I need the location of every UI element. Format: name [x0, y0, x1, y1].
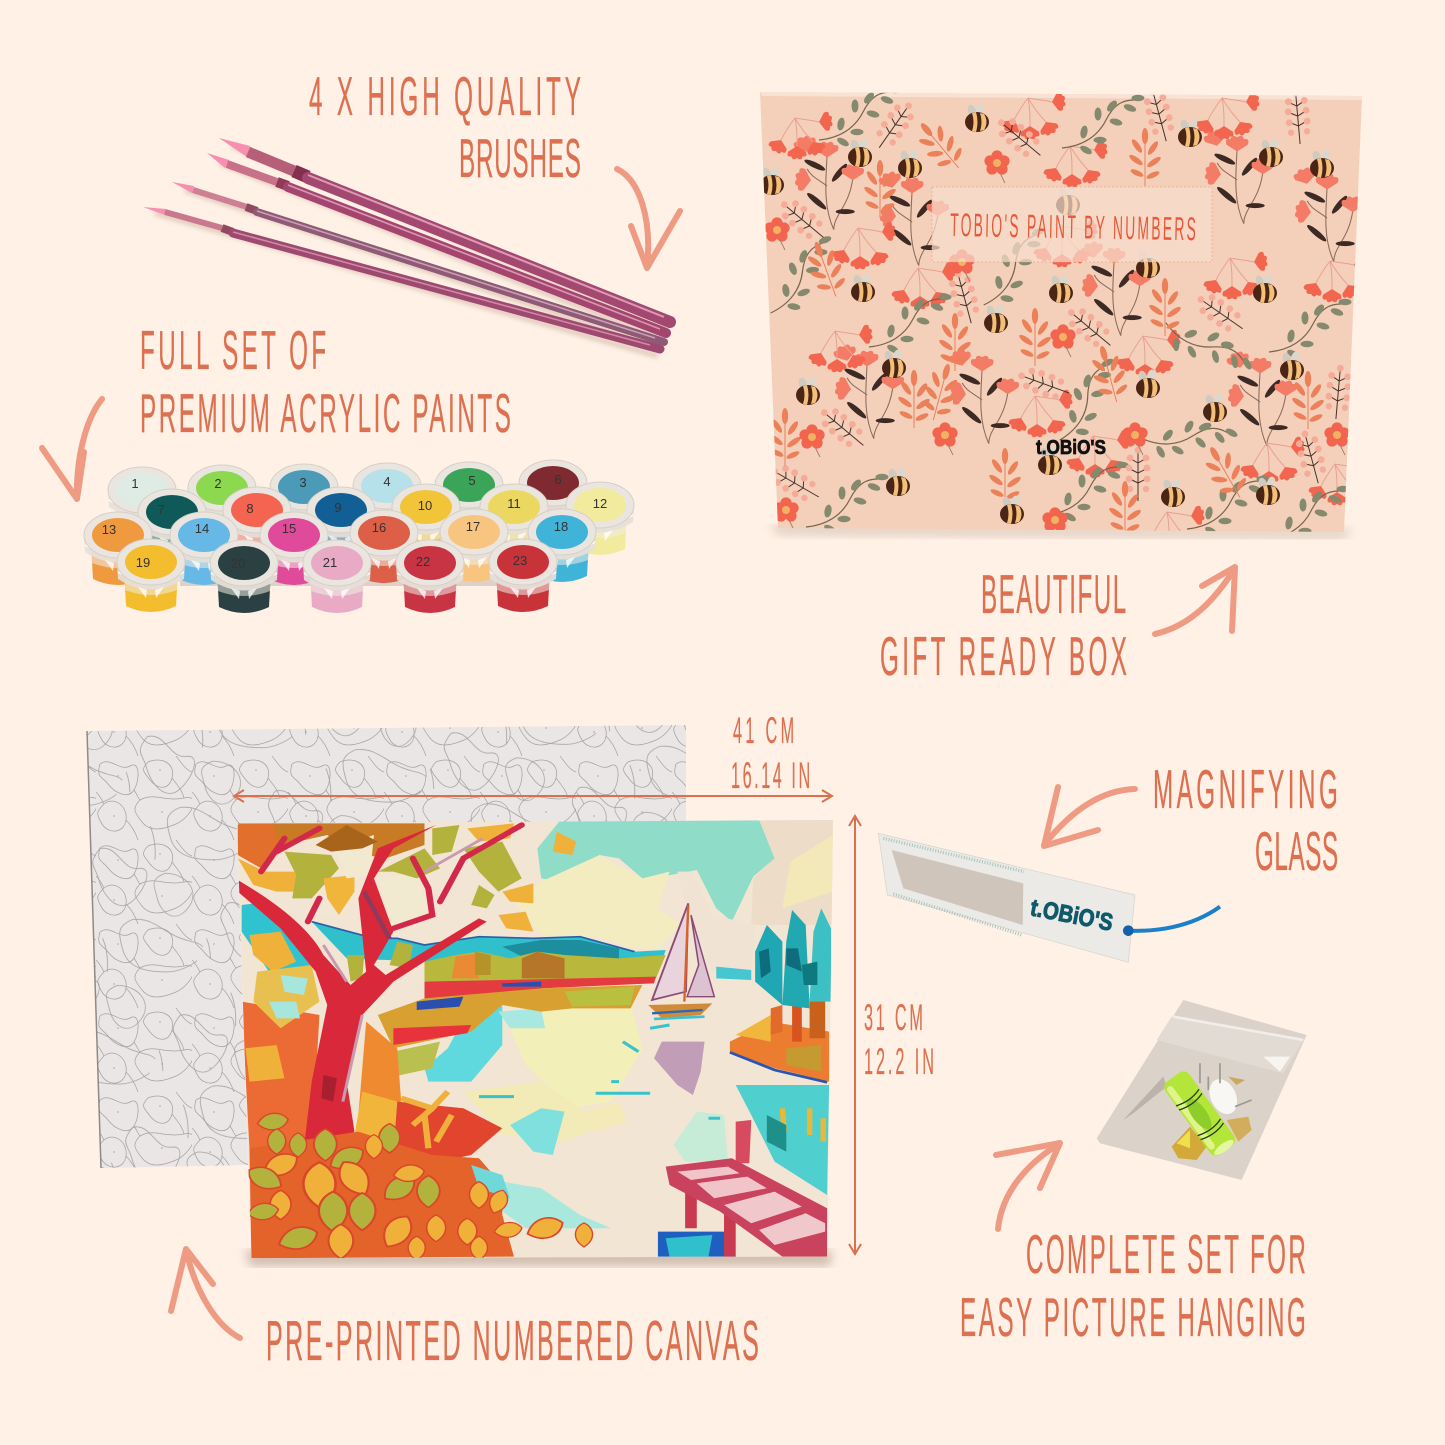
paint pots: 12 — [593, 496, 607, 511]
arrow: to brushes — [617, 169, 680, 268]
painting: foreground leaves — [243, 1092, 593, 1260]
spirit level — [1161, 1068, 1238, 1159]
heading: beautiful gift ready box — [880, 565, 1127, 688]
heading: beautiful gift ready box: GIFT READY BOX — [880, 627, 1127, 688]
dimension: height 31 cm: 31 CM — [864, 998, 923, 1039]
heading: full set of premium acrylic paints: FULL SET OF — [140, 321, 326, 382]
paint pots: 18 — [554, 519, 568, 534]
dimension: height 31 cm: 12.2 IN — [864, 1042, 934, 1083]
paint pots: 6 — [554, 472, 562, 487]
heading: magnifying glass — [1153, 760, 1338, 883]
screws and hooks — [1172, 1063, 1252, 1160]
paint pots: 5 — [468, 473, 476, 488]
paint pots: 14 — [195, 521, 209, 536]
painted canvas — [230, 815, 841, 1266]
paint pots: 22 — [416, 554, 430, 569]
dimension: width 41 cm: 16.14 IN — [731, 756, 810, 797]
brush 2 — [207, 153, 666, 333]
heading: beautiful gift ready box: BEAUTIFUL — [981, 565, 1126, 626]
paint pots: 23 — [513, 553, 527, 568]
heading: magnifying glass: GLASS — [1255, 822, 1338, 883]
dimension: width 41 cm: 41 CM — [733, 711, 794, 752]
paint pots: 7 — [157, 502, 165, 517]
painting: tree trunk and branches — [238, 825, 522, 1162]
paint pots: 4 — [383, 474, 391, 489]
painting: sailboat — [648, 903, 714, 1019]
painting: tree foliage behind trunk — [238, 823, 576, 1148]
heading: complete set for easy picture hanging — [960, 1225, 1306, 1349]
arrow: to magnifier — [1044, 787, 1135, 846]
arrow: to canvas — [171, 1249, 240, 1338]
dimension: width 41 cm — [234, 711, 832, 802]
paint pots: 16 — [372, 520, 386, 535]
heading: full set of premium acrylic paints: PREMIUM ACRYLIC PAINTS — [140, 384, 511, 445]
paint pots: 1 — [131, 476, 139, 491]
magnifying card: t.OBiO'S — [1028, 894, 1115, 937]
brush 4 — [143, 207, 660, 349]
paint pots: 8 — [246, 501, 254, 516]
painting: sky and water — [230, 815, 841, 1265]
brush 3 — [172, 182, 664, 342]
arrow: to box — [1155, 567, 1235, 634]
paint pots: 11 — [507, 496, 521, 511]
paint pots: 13 — [102, 522, 116, 537]
gift box — [753, 85, 1373, 553]
paint pots: 19 — [136, 555, 150, 570]
heading: complete set for easy picture hanging: COMPLETE SET FOR — [1026, 1225, 1306, 1286]
paint pots: 17 — [466, 519, 480, 534]
painting: dock — [658, 1120, 827, 1257]
heading: 4 x high quality brushes: 4 X HIGH QUALITY — [309, 67, 581, 128]
paint pots: 21 — [323, 555, 337, 570]
brushes — [143, 138, 670, 356]
painting: right trees and bank — [730, 908, 831, 1195]
arrow: to hanging kit — [996, 1143, 1060, 1229]
paint pots: 20 — [231, 556, 245, 571]
box label — [932, 187, 1212, 262]
hanging kit bag — [1097, 1000, 1307, 1180]
heading: complete set for easy picture hanging: EASY PICTURE HANGING — [960, 1288, 1306, 1349]
paint pots — [84, 460, 634, 613]
heading: 4 x high quality brushes: BRUSHES — [459, 129, 581, 190]
heading: magnifying glass: MAGNIFYING — [1153, 760, 1338, 821]
box label: TOBIO'S PAINT BY NUMBERS — [950, 207, 1196, 248]
magnifying card — [878, 833, 1220, 962]
brush 1 — [219, 138, 670, 322]
arrow: to paints — [42, 399, 102, 499]
blank numbered canvas — [87, 725, 686, 1168]
heading: full set of premium acrylic paints — [140, 321, 511, 445]
paint pots: 10 — [418, 498, 432, 513]
paint pots: 15 — [282, 521, 296, 536]
paint pots: 2 — [214, 476, 222, 491]
heading: pre-printed numbered canvas: PRE-PRINTED NUMBERED CANVAS — [266, 1310, 759, 1373]
paint pots: 3 — [299, 475, 307, 490]
painting: distant hills and shore — [312, 922, 666, 1078]
paint pots: 9 — [334, 500, 342, 515]
box logo: t.OBiO'S — [1036, 437, 1106, 459]
dimension: height 31 cm — [849, 816, 934, 1254]
heading: 4 x high quality brushes — [309, 67, 581, 190]
